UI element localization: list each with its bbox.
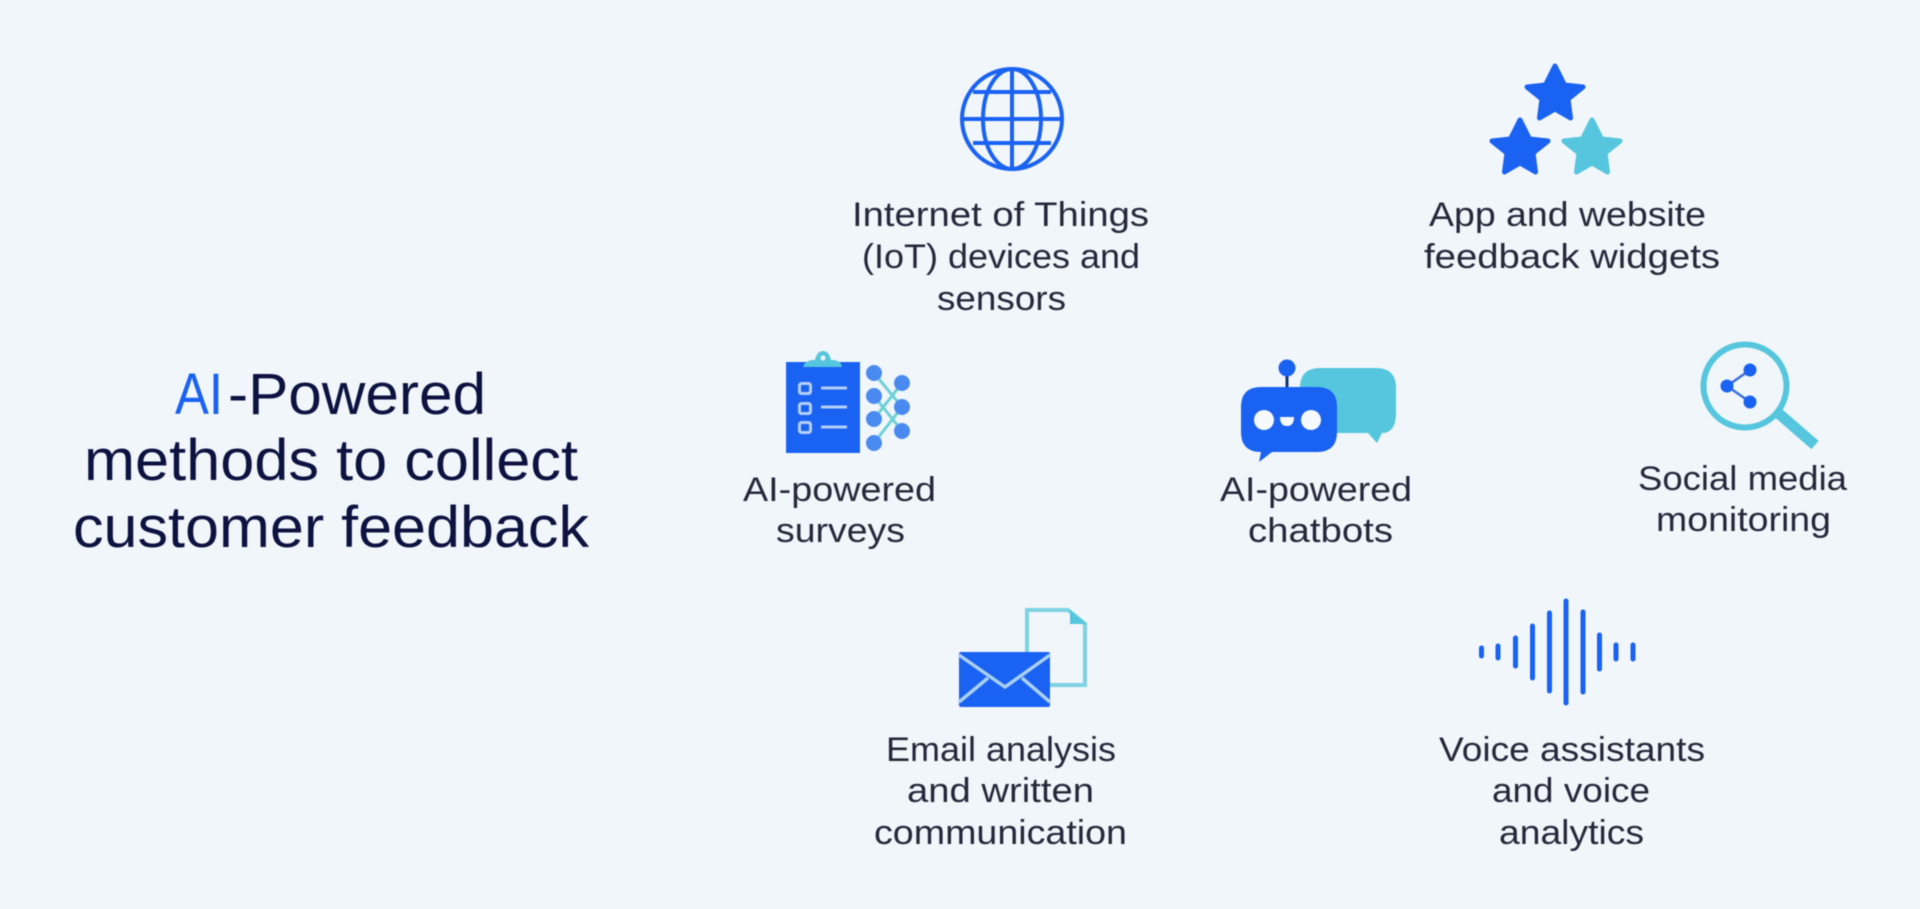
label: AI-powered surveys [743, 471, 936, 550]
icon: chatbot with speech bubble [1241, 360, 1396, 462]
icon: magnifier with share symbol [1704, 344, 1815, 445]
label: Voice assistants and voice analytics: and voice [1492, 772, 1650, 810]
label: Voice assistants and voice analytics [1439, 731, 1705, 852]
label: Voice assistants and voice analytics: analytics [1499, 814, 1644, 852]
label: Social media monitoring [1638, 460, 1848, 539]
label: Internet of Things: (IoT) devices and [862, 238, 1140, 276]
label: Internet of Things: Internet of Things [852, 196, 1149, 234]
label: Social media monitoring: monitoring [1656, 501, 1831, 539]
title: AI [175, 362, 223, 427]
icon: three stars [1492, 66, 1620, 172]
label: App and website feedback widgets [1424, 196, 1720, 276]
icon: globe [962, 69, 1062, 169]
label: AI-powered surveys: AI-powered [743, 471, 936, 509]
title: customer feedback [73, 495, 590, 560]
title [73, 362, 590, 560]
title: -Powered [228, 362, 486, 427]
icon: email envelope with document [959, 610, 1087, 707]
label: Internet of Things: sensors [937, 280, 1066, 318]
label: AI-powered surveys: surveys [776, 512, 905, 550]
label: App and website feedback widgets: feedback widgets [1424, 238, 1720, 276]
label: Voice assistants and voice analytics: Voice assistants [1439, 731, 1705, 769]
label: Email analysis and written communication: and written [907, 772, 1094, 810]
icon: voice waveform [1482, 601, 1633, 703]
icon: survey clipboard with neural network [786, 351, 910, 453]
label: AI-powered chatbots: chatbots [1248, 512, 1393, 550]
label: AI-powered chatbots [1220, 471, 1412, 550]
title: methods to collect [84, 428, 578, 493]
label: App and website feedback widgets: App and website [1429, 196, 1706, 234]
label: AI-powered chatbots: AI-powered [1220, 471, 1412, 509]
label: Email analysis and written communication: communication [874, 814, 1127, 852]
label: Email analysis and written communication: Email analysis [886, 731, 1116, 769]
label: Email analysis and written communication [874, 731, 1127, 852]
label: Internet of Things [852, 196, 1149, 318]
label: Social media monitoring: Social media [1638, 460, 1848, 498]
